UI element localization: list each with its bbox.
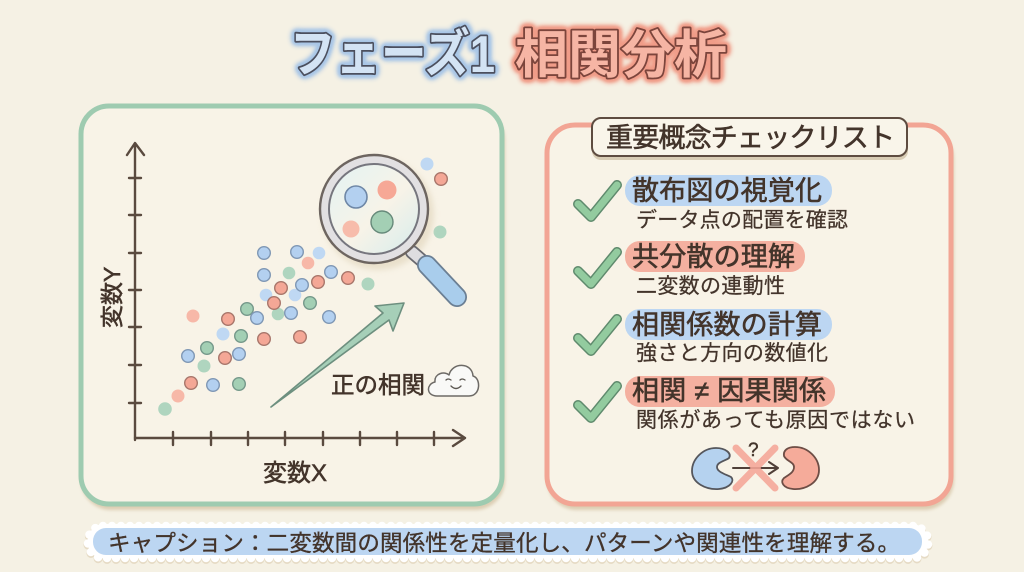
label: positive correlation: 正の相関 (331, 372, 425, 398)
item 1 (578, 175, 848, 232)
chart axes (127, 143, 465, 446)
item 2: 二変数の連動性 (636, 275, 785, 298)
item 1: 散布図の視覚化 (632, 176, 822, 206)
title (290, 26, 727, 85)
icon: magnifying glass (320, 155, 457, 297)
item 3: 強さと方向の数値化 (636, 342, 828, 365)
icon: correlation is not causation: ? (748, 440, 759, 461)
scatter points (158, 158, 447, 416)
icon: correlation is not causation (692, 440, 819, 489)
title: 相関分析 (515, 27, 727, 85)
caption bar: キャプション：二変数間の関係性を定量化し、パターンや関連性を理解する。 (108, 531, 900, 556)
item 3 (578, 309, 832, 365)
panel: scatter chart (81, 106, 505, 510)
item 3: 相関係数の計算 (632, 310, 822, 340)
item 4: 相関 ≠ 因果関係 (632, 376, 826, 406)
axis label: X: 変数X (263, 460, 327, 487)
checklist heading: 重要概念チェックリスト (606, 123, 895, 153)
item 4: 関係があっても原因ではない (636, 409, 915, 432)
title: フェーズ1 (290, 26, 495, 84)
item 4 (578, 376, 915, 432)
checklist heading (592, 118, 908, 160)
item 1: データ点の配置を確認 (636, 209, 848, 232)
icon: smiling cloud (428, 365, 479, 396)
panel: checklist (547, 118, 954, 510)
caption bar (88, 524, 928, 560)
item 2: 共分散の理解 (632, 242, 795, 272)
axis label: Y: 変数Y (99, 267, 125, 328)
arrow: positive correlation (271, 303, 404, 407)
item 2 (578, 241, 805, 298)
